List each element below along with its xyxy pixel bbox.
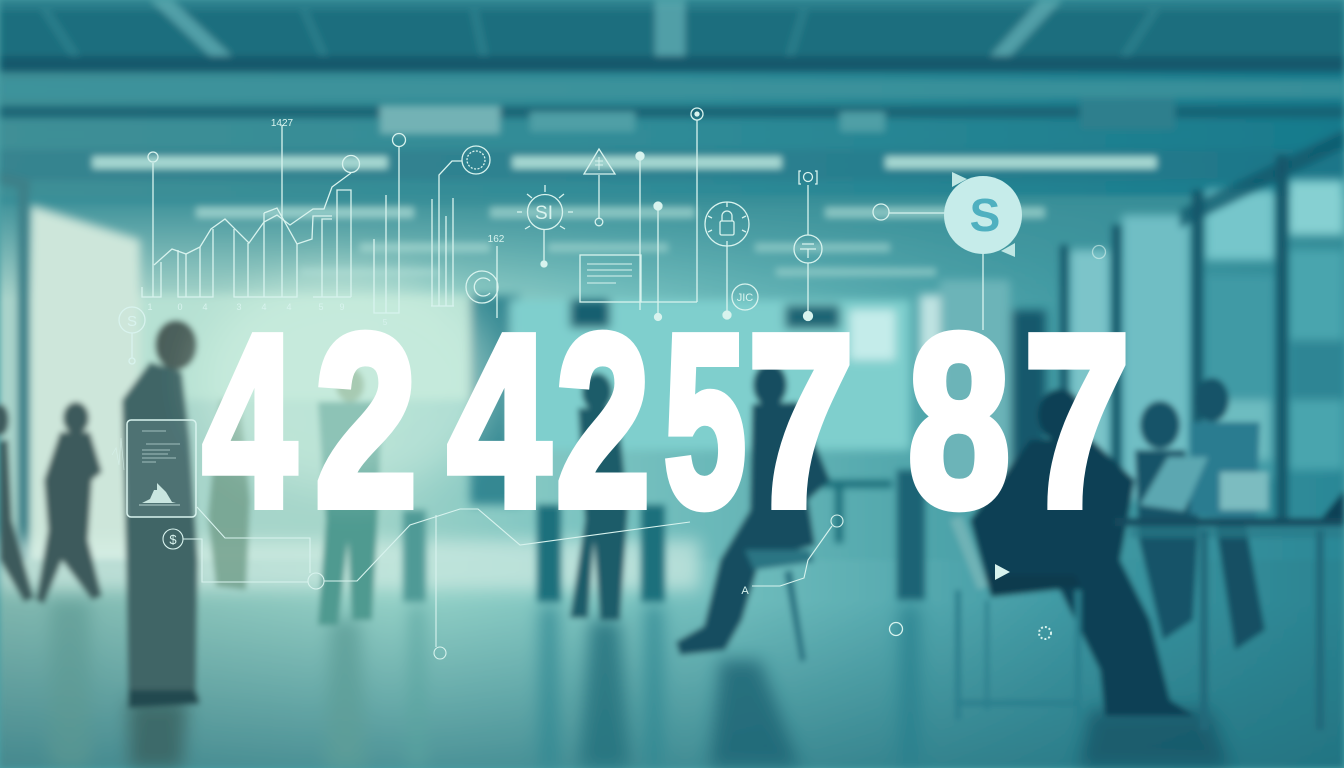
large white numbers: 7 [1024, 284, 1130, 557]
icon: S circle left: S [127, 313, 137, 330]
icon: sun S: SI [535, 203, 553, 224]
chart value label: 1427 [271, 118, 294, 129]
large white numbers: 4 [203, 284, 296, 557]
chart overlay: line chart and icons [112, 108, 1106, 659]
icon: S circle left [119, 307, 145, 364]
chart axis labels: 0 [177, 302, 183, 312]
person: seated right [950, 389, 1195, 716]
icon: sun S [517, 185, 573, 267]
floor reflections [50, 600, 1230, 768]
circuit connector lines [163, 507, 843, 659]
people: right group [1135, 378, 1265, 650]
icon: camera and currency node [794, 171, 822, 320]
large white numbers: 5 [664, 284, 746, 557]
person: far left figures [0, 402, 102, 604]
person: seated centre [676, 363, 830, 662]
chart axis labels: 5 [318, 302, 324, 312]
large white numbers: 2 [315, 284, 417, 557]
floor [0, 540, 1344, 768]
people silhouettes [0, 320, 1344, 730]
window frames [0, 130, 1344, 580]
large S coin icon [873, 172, 1022, 330]
large S coin icon: S [970, 189, 1000, 241]
document box with connectors [580, 108, 703, 320]
ceiling [0, 0, 1344, 210]
person: standing centre [570, 373, 628, 620]
chart axis labels: 4 [286, 302, 292, 312]
icon: C circle with 162 label [466, 234, 505, 318]
laptop and table [955, 457, 1344, 730]
large white numbers: 4 [448, 284, 550, 557]
large white numbers [203, 284, 1130, 557]
info panel with mini chart [112, 420, 196, 517]
icon: warning triangle [584, 149, 615, 226]
back wall and windows [0, 130, 1344, 580]
second bar group: 5 [383, 318, 388, 327]
icon: padlock circle [705, 202, 749, 319]
chart axis labels [147, 302, 345, 312]
large white numbers: 2 [556, 284, 650, 557]
chart axis labels: 9 [339, 302, 345, 312]
large white numbers: 8 [908, 284, 1010, 557]
third bar group with node icon [431, 146, 490, 306]
chart axis labels: 1 [147, 302, 153, 312]
chart axis labels: 4 [261, 302, 267, 312]
chart axis labels: 4 [202, 302, 208, 312]
scattered nodes [331, 246, 1106, 639]
icon: C circle with 162 label: 162 [488, 234, 505, 245]
soft glow [200, 270, 500, 490]
second bar group [374, 134, 406, 327]
icon: JIC badge [732, 284, 758, 310]
columns [403, 470, 925, 602]
bar and line chart [142, 118, 360, 312]
large white numbers: 7 [748, 284, 854, 557]
ceiling light strips [92, 156, 1157, 169]
circuit connector lines: $ [169, 532, 177, 547]
icon: JIC badge: JIC [737, 292, 753, 304]
chart axis labels: 3 [236, 302, 242, 312]
person: centre green figure [208, 368, 382, 625]
person: standing man left [122, 320, 200, 708]
circuit connector lines: A [741, 585, 749, 597]
